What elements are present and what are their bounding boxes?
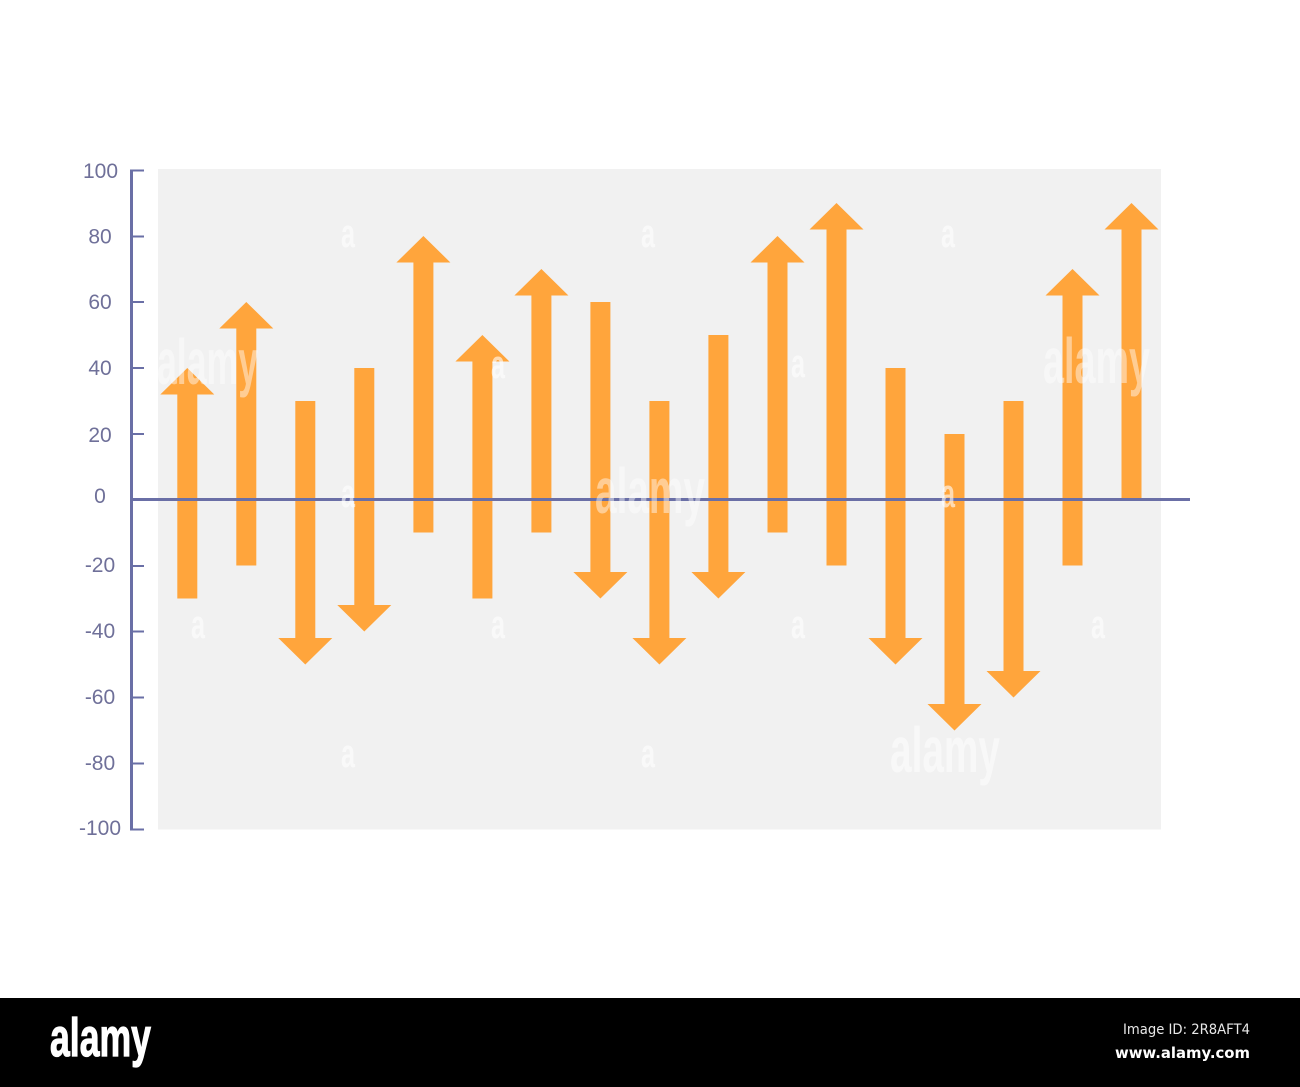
arrow 14: down, 20 to -70	[928, 434, 982, 730]
watermark: small a marks: a	[941, 472, 955, 516]
watermark: large alamy marks: alamy	[595, 455, 705, 527]
y axis labels	[79, 160, 121, 840]
watermark: small a marks: a	[641, 212, 655, 256]
arrow 5: up, -10 to 80	[396, 236, 450, 532]
watermark: small a marks: a	[641, 732, 655, 776]
y axis labels: 80	[88, 226, 112, 248]
arrow 4: down, 40 to -40	[337, 368, 391, 632]
y axis labels: 40	[88, 357, 112, 380]
y axis labels: 100	[83, 160, 118, 183]
arrow 11: up, -10 to 80	[750, 236, 804, 532]
watermark: small a marks	[191, 212, 1105, 776]
arrow 16: up, -20 to 70	[1046, 269, 1100, 566]
arrow 17: up, 0 to 90	[1104, 203, 1158, 500]
y axis labels: -100	[79, 817, 121, 840]
arrows: series of seventeen up and down arrows	[160, 203, 1159, 730]
watermark: large alamy marks: alamy	[157, 326, 258, 398]
arrow 10: down, 50 to -30	[691, 335, 745, 598]
arrow 6: up, -30 to 50	[455, 335, 509, 598]
image id: Image ID: 2R8AFT4	[1123, 1022, 1250, 1038]
y axis labels: 0	[94, 485, 106, 508]
arrow 9: down, 30 to -50	[632, 401, 686, 664]
arrow 1: up, -30 to 40	[160, 368, 214, 598]
arrow 7: up, -10 to 70	[514, 269, 568, 532]
arrow 3: down, 30 to -50	[278, 401, 332, 664]
y axis labels: 20	[88, 424, 112, 447]
arrow 13: down, 40 to -50	[868, 368, 922, 664]
y axis labels: -80	[85, 752, 115, 775]
watermark: small a marks: a	[491, 343, 505, 387]
watermark: small a marks: a	[341, 732, 355, 776]
panel: chart plot background	[158, 169, 1161, 830]
watermark: small a marks: a	[191, 603, 205, 647]
y axis labels: -60	[85, 686, 115, 709]
watermark: small a marks: a	[1091, 603, 1105, 647]
watermark: large alamy marks: alamy	[890, 714, 1000, 786]
y axis labels: 60	[88, 291, 112, 314]
footer logo: alamy	[50, 1008, 151, 1068]
watermark: large alamy marks	[157, 325, 1150, 786]
arrow 15: down, 30 to -60	[986, 401, 1040, 698]
arrow 8: down, 60 to -30	[573, 302, 627, 598]
y axis labels: -40	[85, 620, 115, 643]
watermark: small a marks: a	[941, 212, 955, 256]
watermark: small a marks: a	[341, 212, 355, 256]
watermark: small a marks: a	[491, 603, 505, 647]
watermark: small a marks: a	[341, 472, 355, 516]
y axis labels: -20	[85, 554, 115, 577]
footer bar	[0, 998, 1300, 1087]
arrow 2: up, -20 to 60	[219, 302, 273, 566]
zero baseline	[131, 498, 1190, 501]
arrow 12: up, -20 to 90	[810, 203, 864, 566]
website: www.alamy.com	[1115, 1044, 1250, 1062]
watermark: large alamy marks: alamy	[1043, 325, 1150, 397]
y axis with ticks	[130, 170, 144, 830]
watermark: small a marks: a	[791, 603, 805, 647]
watermark: small a marks: a	[791, 342, 805, 386]
